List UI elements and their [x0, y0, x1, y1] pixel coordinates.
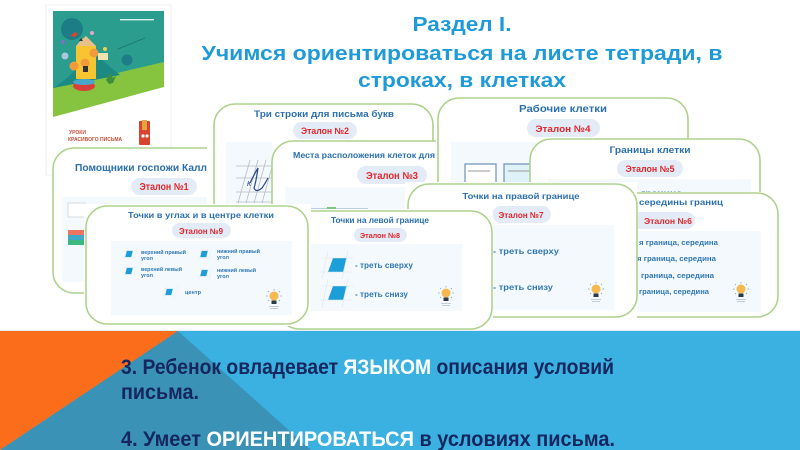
card: left border points, standard 8	[275, 209, 493, 330]
card: cell positions, standard 3: Места расположения клеток для	[293, 150, 435, 160]
card: corner and centre points, standard 9: угол	[217, 274, 229, 280]
card: corner and centre points, standard 9: верхний левый	[141, 266, 182, 273]
card: corner and centre points, standard 9	[84, 204, 311, 326]
book cover	[46, 5, 171, 175]
title: строках, в клетках	[358, 70, 566, 92]
bottom band	[0, 330, 800, 450]
card: three lines, standard 2: к	[247, 178, 252, 188]
card: cell borders, standard 5: Границы клетки	[610, 145, 690, 155]
card: working cells, standard 4: Рабочие клетки	[519, 103, 607, 115]
card: corner and centre points, standard 9: Эталон №9	[179, 227, 224, 236]
book cover: УРОКИ	[69, 130, 86, 136]
card: midpoints of borders, standard 6: Эталон №6	[644, 216, 692, 226]
card: corner and centre points, standard 9: угол	[217, 255, 229, 261]
card: three lines, standard 2	[207, 98, 439, 234]
card: corner and centre points, standard 9: угол	[141, 256, 153, 262]
card: corner and centre points, standard 9: угол	[141, 273, 153, 279]
card: cell positions, standard 3: Эталон №3	[366, 171, 418, 182]
card: right border points, standard 7: Точки на правой границе	[462, 191, 580, 201]
title: Учимся ориентироваться на листе тетради, в	[202, 43, 722, 65]
card: helpers, standard 1: Помощники госпожи Калл	[75, 162, 207, 174]
card: midpoints of borders, standard 6: граница, середина	[641, 271, 715, 280]
card: left border points, standard 8: - треть сверху	[355, 261, 414, 270]
card: midpoints of borders, standard 6: я граница, середина	[637, 254, 717, 263]
title: Раздел I.	[412, 14, 512, 36]
card: right border points, standard 7: - треть снизу	[493, 282, 553, 292]
card: left border points, standard 8: Точки на левой границе	[331, 216, 430, 225]
card: right border points, standard 7	[405, 182, 637, 319]
card: cell borders, standard 5	[530, 139, 760, 229]
card: midpoints of borders, standard 6: граница, середина	[639, 287, 710, 296]
card: cell borders, standard 5: граница	[641, 188, 682, 198]
card: corner and centre points, standard 9: Точки в углах и в центре клетки	[128, 210, 274, 220]
title	[202, 14, 722, 92]
card: corner and centre points, standard 9: верхний правый	[141, 249, 186, 256]
card: right border points, standard 7: - треть сверху	[493, 246, 559, 256]
card: left border points, standard 8: Эталон №8	[360, 231, 400, 240]
card: three lines, standard 2: Три строки для письма букв	[254, 109, 394, 120]
card: cell positions, standard 3	[272, 141, 462, 231]
card: midpoints of borders, standard 6: я граница, середина	[639, 238, 719, 247]
card: three lines, standard 2: Эталон №2	[301, 126, 349, 136]
card: corner and centre points, standard 9: центр	[185, 290, 201, 296]
card: left border points, standard 8: - треть снизу	[355, 290, 409, 299]
card: helpers, standard 1	[53, 148, 228, 293]
card: corner and centre points, standard 9: нижний левый	[217, 267, 256, 274]
card: working cells, standard 4: Эталон №4	[536, 124, 591, 135]
bottom text: письма.	[121, 381, 199, 404]
book cover: КРАСИВОГО ПИСЬМА	[68, 137, 122, 143]
bottom text	[121, 356, 615, 450]
card: working cells, standard 4	[436, 96, 692, 218]
card: right border points, standard 7: Эталон №7	[498, 210, 544, 220]
card: corner and centre points, standard 9: нижний правый	[217, 248, 260, 255]
card: helpers, standard 1: Эталон №1	[140, 182, 189, 193]
card: midpoints of borders, standard 6: середины границ	[639, 197, 724, 207]
bottom text: 3. Ребенок овладевает ЯЗЫКОМ описания условий	[121, 356, 614, 379]
card: cell borders, standard 5: Эталон №5	[626, 164, 674, 174]
card: midpoints of borders, standard 6	[600, 192, 782, 320]
